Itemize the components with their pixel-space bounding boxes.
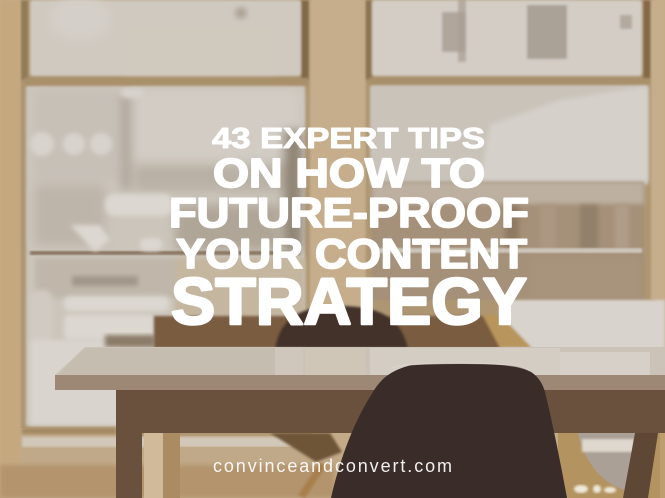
title line 5: STRATEGY bbox=[171, 264, 527, 338]
blurred table and chair behind bbox=[154, 300, 665, 350]
table leg left bbox=[116, 433, 142, 498]
title line 3: FUTURE-PROOF bbox=[169, 189, 529, 236]
website url: convinceandconvert.com bbox=[213, 456, 452, 476]
chair bbox=[331, 364, 567, 498]
right side under table bbox=[558, 433, 665, 498]
title line 4: YOUR CONTENT bbox=[176, 230, 527, 277]
chair top highlight bbox=[392, 363, 530, 371]
table apron bbox=[116, 390, 665, 433]
title bbox=[169, 123, 529, 338]
window pane: top right bbox=[372, 0, 642, 76]
table leg right bbox=[623, 433, 658, 498]
title line 1: 43 EXPERT TIPS bbox=[212, 123, 485, 155]
window pane: lower right bbox=[370, 85, 648, 300]
window pane: lower left bbox=[26, 86, 305, 426]
background leg strips bbox=[144, 433, 342, 498]
lower left bright blobs bbox=[30, 194, 173, 425]
lower left bokeh bbox=[30, 88, 144, 156]
title line 2: ON HOW TO bbox=[213, 150, 485, 196]
window pane: top left bbox=[30, 0, 301, 76]
floor and sill bbox=[0, 428, 340, 498]
table top bbox=[55, 347, 665, 375]
table edge bbox=[55, 375, 665, 390]
lower left blurred city bbox=[35, 90, 302, 250]
lower right shelf stripes bbox=[505, 205, 640, 300]
table top reflections bbox=[58, 348, 650, 375]
lower left shelf line bbox=[30, 251, 300, 255]
